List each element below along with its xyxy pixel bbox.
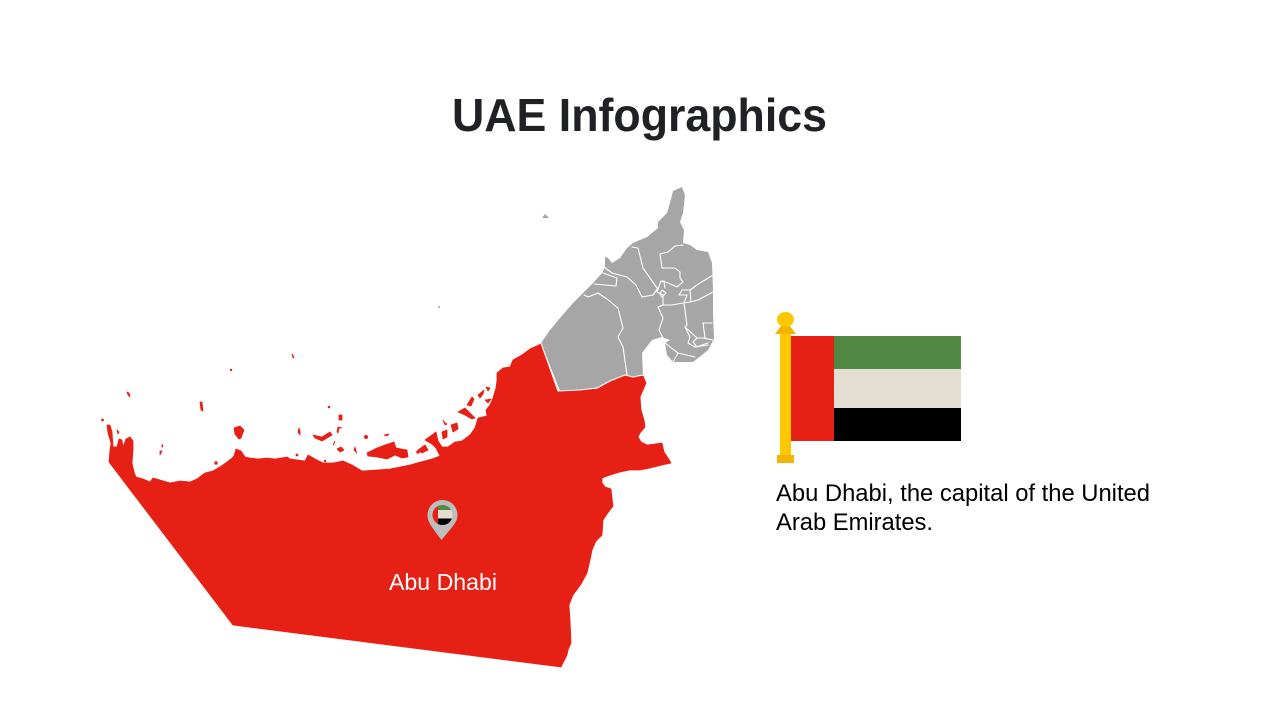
emirate borders [541, 245, 713, 391]
map of the UAE [102, 187, 714, 667]
pole base [777, 455, 794, 463]
pole finial [775, 326, 796, 334]
title: UAE Infographics [452, 89, 827, 141]
description text [776, 480, 1150, 536]
location pin: Abu Dhabi [428, 500, 458, 540]
description text: Arab Emirates. [776, 509, 933, 536]
flag pole [780, 334, 791, 455]
flag bands [791, 336, 834, 441]
description text: Abu Dhabi, the capital of the United [776, 480, 1150, 507]
grey islands [437, 214, 549, 308]
region: Abu Dhabi in red [102, 344, 671, 667]
islands [367, 442, 408, 459]
region: northern emirates in grey [437, 187, 714, 391]
map label: Abu Dhabi: Abu Dhabi [389, 569, 497, 595]
icon: UAE flag on pole [775, 312, 961, 463]
